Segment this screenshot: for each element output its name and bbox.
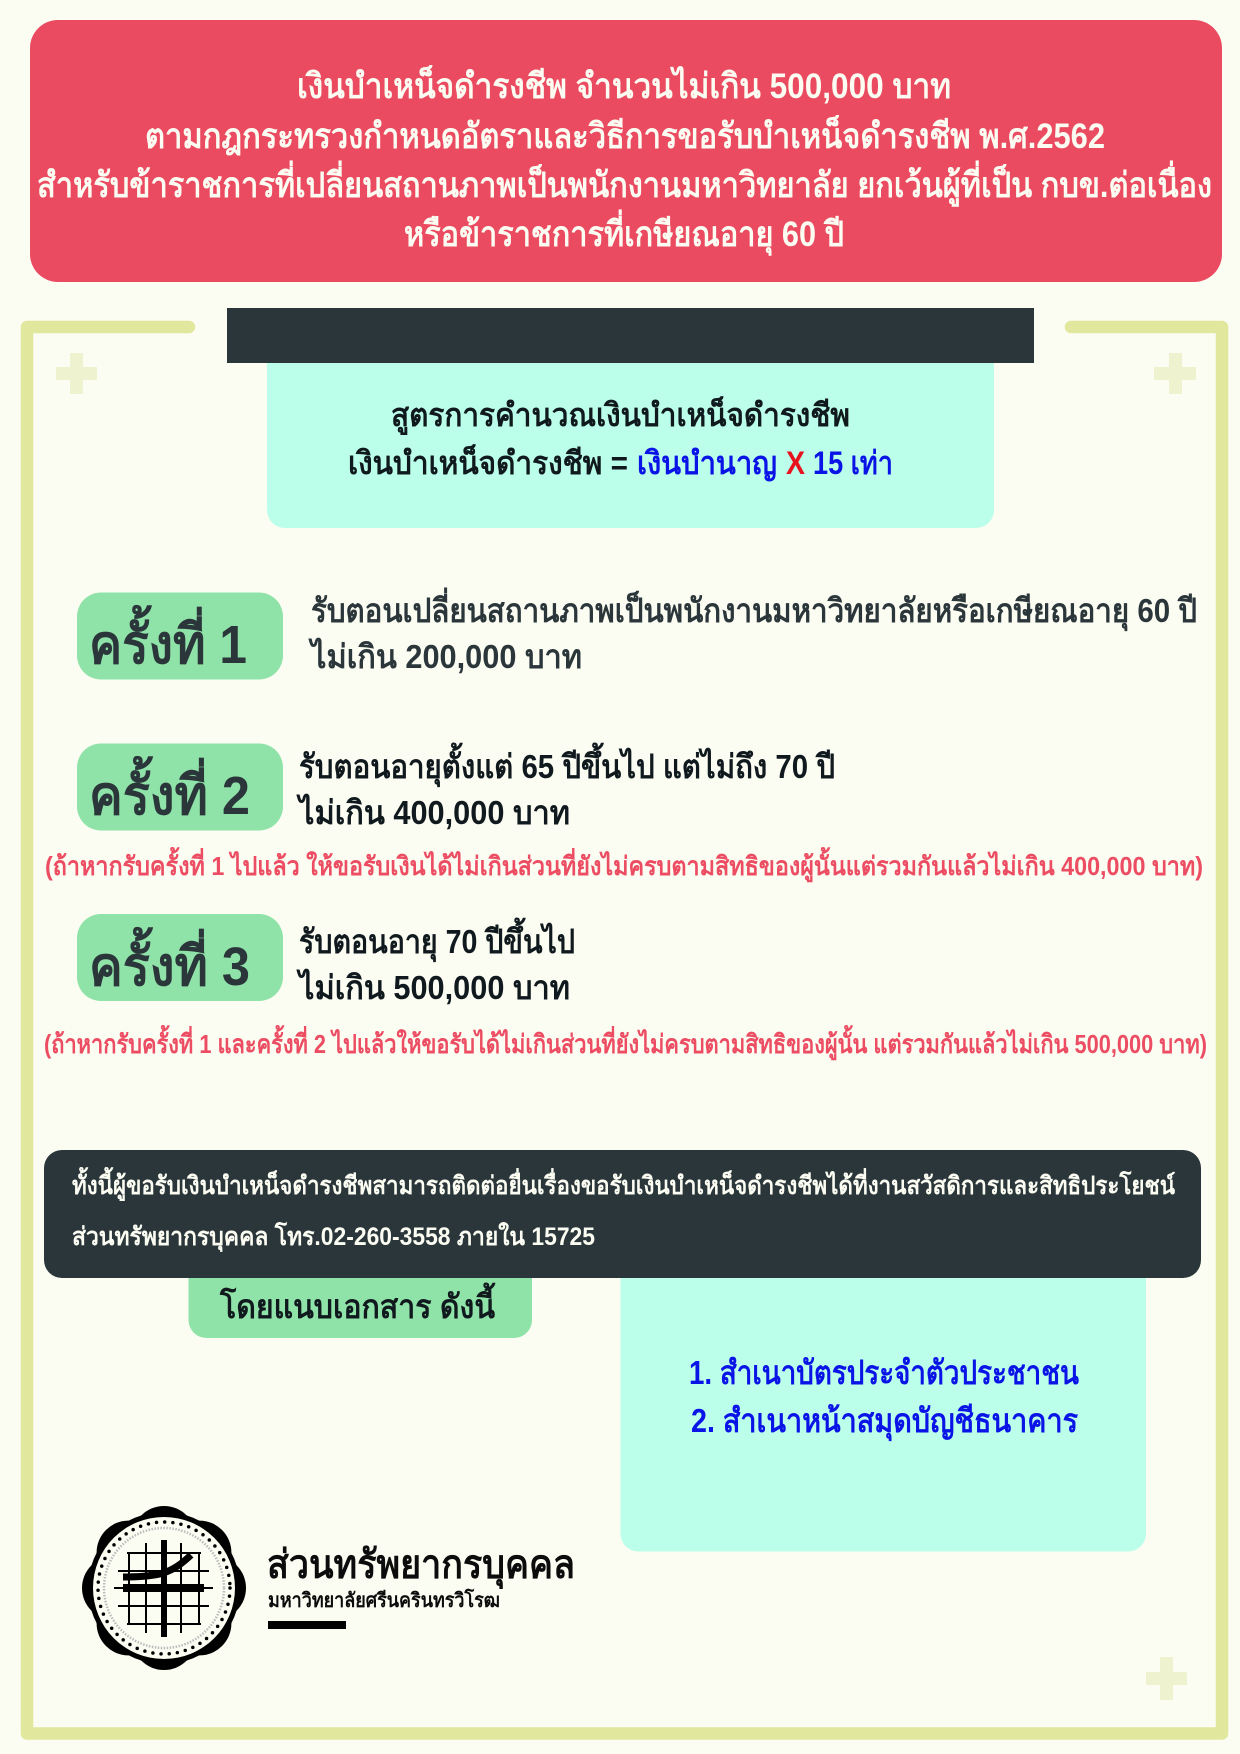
row: first payment <box>77 587 1197 680</box>
document list items <box>689 1354 1079 1442</box>
formula equation: เงินบำนาญ <box>637 445 777 482</box>
formula header bar <box>227 308 1034 363</box>
title text <box>37 64 1212 256</box>
logo wordmark: ส่วนทรัพยากรบุคคล <box>267 1543 575 1590</box>
title text: หรือข้าราชการที่เกษียณอายุ 60 ปี <box>404 209 844 256</box>
description: first payment: ไม่เกิน 200,000 บาท <box>308 637 582 675</box>
logo underline <box>268 1621 346 1629</box>
badge: ครั้งที่ 3: ครั้งที่ 3 <box>89 927 250 997</box>
logo wordmark <box>267 1543 575 1612</box>
row: third payment <box>44 914 1207 1061</box>
icon: plus top left <box>56 353 97 394</box>
badge: ครั้งที่ 3 <box>77 914 283 1001</box>
formula equation: เงินบำเหน็จดำรงชีพ = <box>348 443 628 481</box>
contact text <box>72 1166 1175 1253</box>
logo subtitle: มหาวิทยาลัยศรีนครินทรวิโรฒ <box>268 1588 500 1612</box>
badge: ครั้งที่ 2: ครั้งที่ 2 <box>89 756 250 826</box>
row: second payment <box>45 742 1203 883</box>
badge: ครั้งที่ 2 <box>77 744 283 830</box>
icon: plus top right <box>1154 353 1196 394</box>
tab: attached documents: โดยแนบเอกสาร ดังนี้ <box>219 1282 496 1325</box>
description: third payment: รับตอนอายุ 70 ปีขึ้นไป <box>299 917 575 963</box>
formula equation <box>348 443 893 482</box>
content frame <box>27 327 1222 1734</box>
panel: document list <box>620 1278 1146 1552</box>
description: second payment: รับตอนอายุตั้งแต่ 65 ปีขึ้นไป แต่ไม่ถึง 70 ปี <box>299 742 835 788</box>
formula heading: สูตรการคำนวณเงินบำเหน็จดำรงชีพ <box>391 395 850 436</box>
description: second payment: ไม่เกิน 400,000 บาท <box>296 793 570 831</box>
tab: attached documents <box>188 1278 532 1338</box>
formula equation: X <box>786 445 806 481</box>
description: first payment <box>308 587 1197 675</box>
icon: plus bottom right <box>1146 1657 1187 1700</box>
logo: university seal <box>82 1506 246 1670</box>
title text: เงินบำเหน็จดำรงชีพ จำนวนไม่เกิน 500,000 บาท <box>297 64 951 106</box>
description: third payment <box>296 917 575 1006</box>
formula equation: 15 เท่า <box>813 445 893 481</box>
panel: contact information <box>44 1150 1201 1278</box>
badge: ครั้งที่ 1 <box>77 592 283 680</box>
document list items: 1. สำเนาบัตรประจำตัวประชาชน <box>689 1354 1079 1391</box>
badge: ครั้งที่ 1: ครั้งที่ 1 <box>89 605 247 675</box>
contact text: ส่วนทรัพยากรบุคคล โทร.02-260-3558 ภายใน 15725 <box>72 1221 595 1253</box>
panel: red title banner <box>30 20 1222 282</box>
description: second payment <box>296 742 835 831</box>
description: third payment: ไม่เกิน 500,000 บาท <box>296 968 570 1006</box>
document list items: 2. สำเนาหน้าสมุดบัญชีธนาคาร <box>691 1402 1078 1442</box>
panel: formula <box>267 362 994 528</box>
title text: ตามกฎกระทรวงกำหนดอัตราและวิธีการขอรับบำเหน็จดำรงชีพ พ.ศ.2562 <box>145 114 1105 156</box>
